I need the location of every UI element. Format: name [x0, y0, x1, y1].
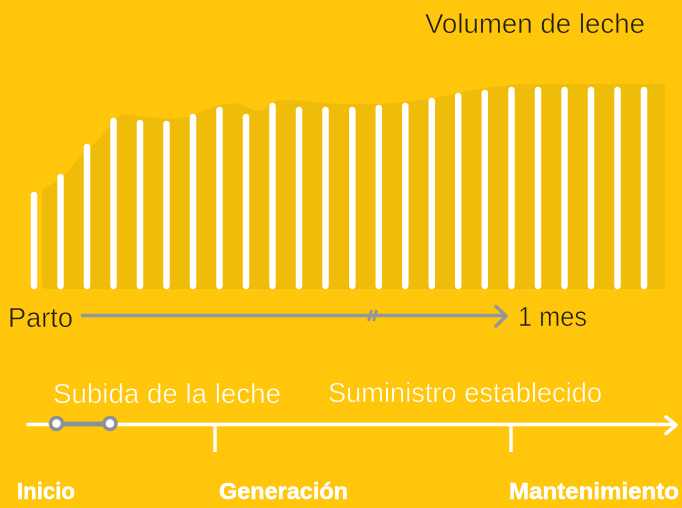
timeline axis with arrow — [28, 417, 676, 452]
label: Inicio: Inicio — [17, 478, 75, 504]
label: Mantenimiento: Mantenimiento — [509, 478, 679, 504]
label: Generación: Generación — [219, 478, 348, 504]
label: Subida de la leche: Subida de la leche — [53, 378, 281, 409]
bars: daily milk volume — [34, 90, 644, 286]
label: Parto: Parto — [8, 302, 73, 333]
title: Volumen de leche: Volumen de leche — [425, 8, 645, 39]
arrow: time axis — [81, 306, 506, 326]
label: Suministro establecido: Suministro establecido — [328, 377, 602, 408]
milestone: milk coming-in range — [50, 418, 116, 430]
area chart: milk volume — [42, 84, 665, 289]
label: 1 mes: 1 mes — [518, 301, 587, 332]
